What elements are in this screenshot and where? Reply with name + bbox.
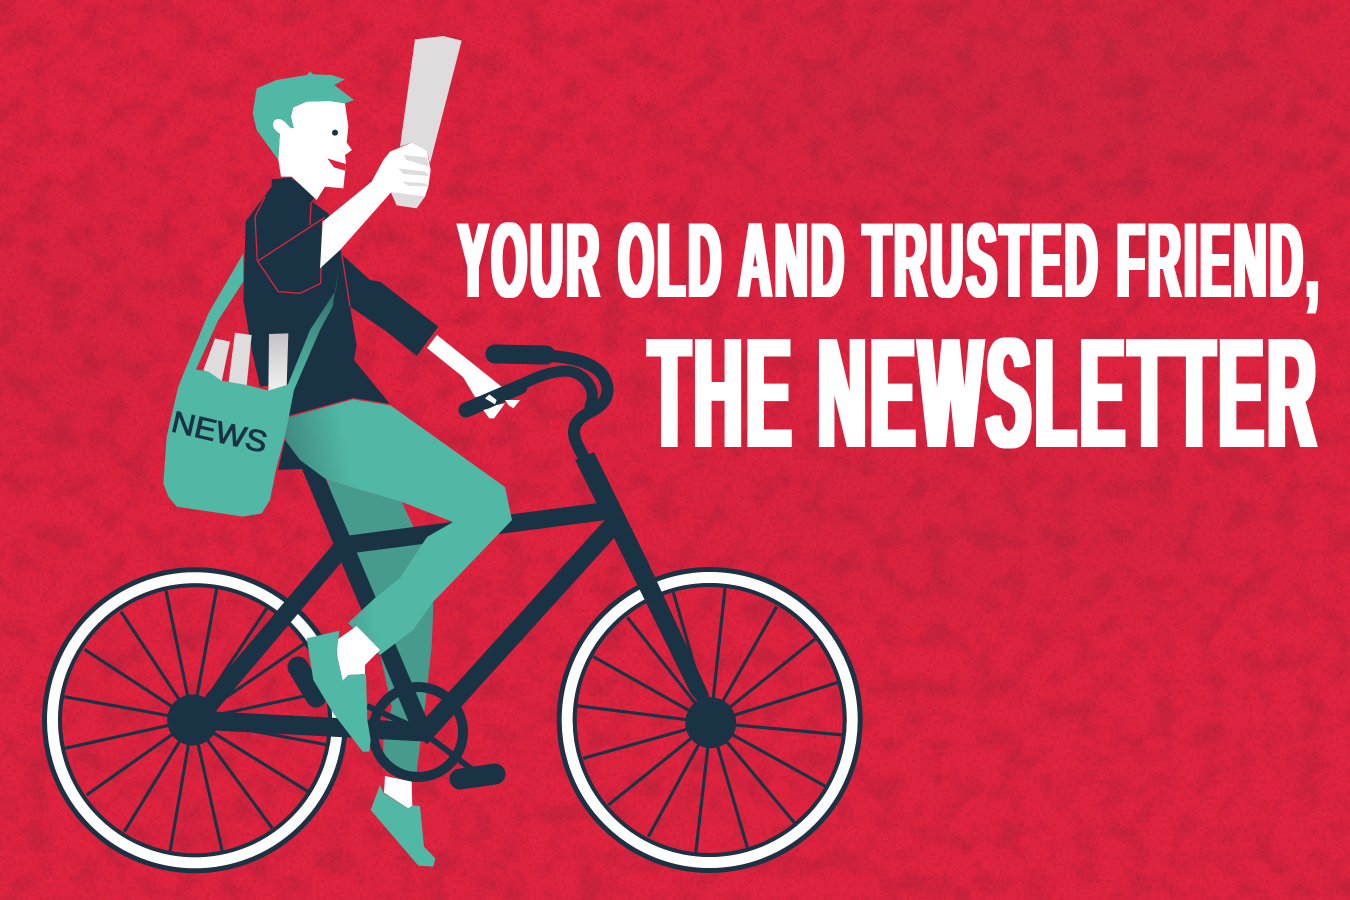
fork	[575, 452, 714, 722]
smile	[327, 158, 346, 171]
shirt torso	[243, 177, 390, 417]
left sleeve	[341, 253, 438, 356]
frame tubes	[195, 465, 614, 738]
back sock and shoe	[371, 776, 435, 867]
bicycle	[44, 354, 860, 871]
red hem line	[288, 399, 390, 417]
cyclist	[163, 36, 520, 867]
forearm on handlebar	[427, 335, 502, 397]
front wheel	[559, 570, 860, 870]
rear wheel	[44, 570, 346, 871]
back leg behind the frame	[327, 480, 433, 772]
bag strap	[185, 253, 243, 370]
raised newspaper	[391, 36, 462, 208]
neck and face	[278, 101, 352, 200]
bag front strap	[287, 255, 341, 390]
upper body	[163, 36, 462, 517]
fingers on grip	[483, 394, 520, 418]
front leg	[285, 398, 512, 655]
bag label: NEWS	[168, 406, 270, 460]
lower handlebar grip	[466, 387, 520, 410]
eye	[332, 130, 338, 136]
news bag	[163, 369, 294, 517]
chainring and cranks	[298, 667, 495, 779]
shirt seams and sleeve	[255, 177, 350, 307]
saddle	[278, 440, 325, 470]
ear	[273, 119, 290, 135]
rolled papers in bag	[203, 333, 288, 392]
front sock and shoe	[307, 626, 380, 752]
handlebars	[495, 354, 608, 456]
raised arm and hand	[320, 143, 431, 268]
hair	[253, 72, 354, 160]
headline	[458, 200, 1322, 481]
